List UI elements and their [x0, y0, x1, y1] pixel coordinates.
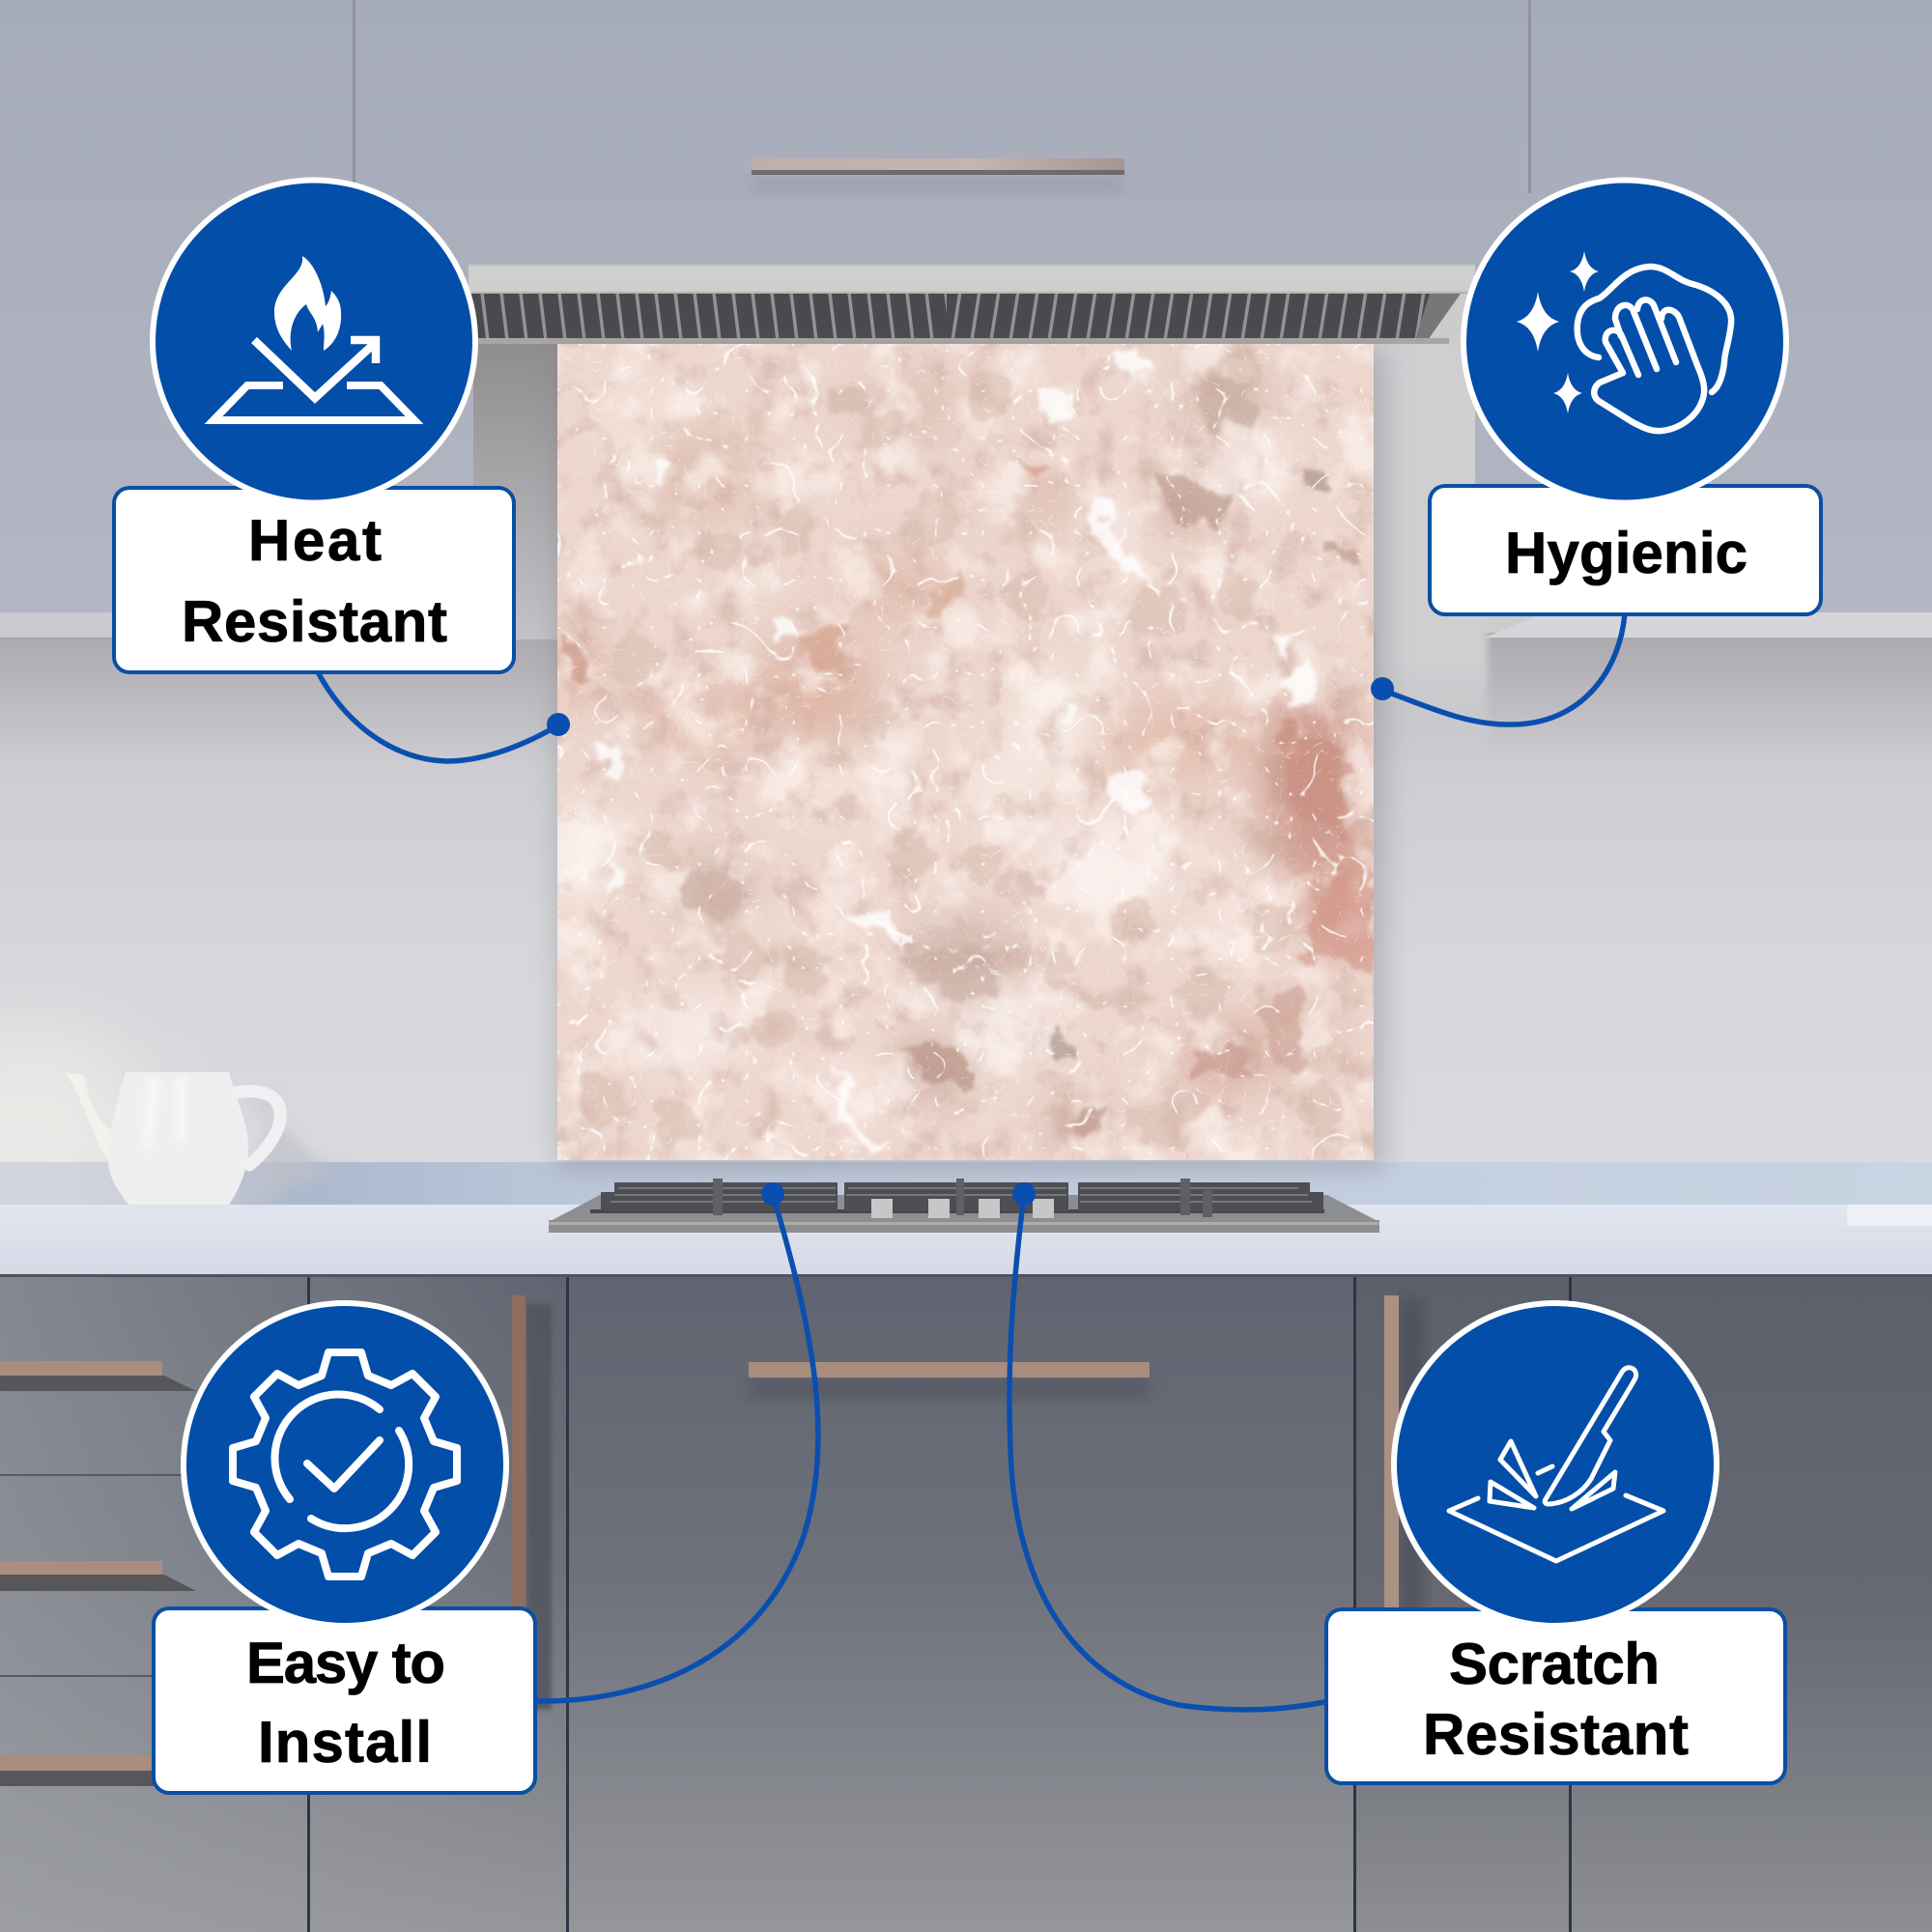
label box: heat resistant: Heat: [248, 508, 382, 573]
range hood: [469, 263, 1475, 344]
connector: hygienic: [1371, 612, 1625, 724]
shaded wall beside hood: [469, 340, 557, 639]
label box: scratch resistant: Resistant: [1423, 1702, 1689, 1767]
upper cabinet centre: [0, 0, 1932, 266]
label box: heat resistant: [114, 488, 514, 672]
wall: [0, 343, 1932, 1236]
counter back strip: [0, 1162, 1932, 1207]
feature: heat resistant: [114, 180, 514, 672]
label box: scratch resistant: [1326, 1609, 1785, 1783]
lower cabinets: [0, 1274, 1932, 1932]
feature: hygienic: [1430, 180, 1821, 614]
icon: knife scratching surface: [1449, 1368, 1663, 1561]
feature: scratch resistant: [1326, 1303, 1785, 1783]
circle badge: heat resistant: [153, 180, 475, 502]
teapot: [66, 1072, 357, 1208]
circle badge: easy to install: [184, 1303, 506, 1626]
upper cabinet right: [1475, 0, 1932, 638]
cabinet door gaps: [353, 0, 1531, 266]
circle badge: hygienic: [1463, 180, 1786, 502]
lower cabinet handles: [0, 1295, 1424, 1786]
label box: hygienic: [1430, 486, 1821, 614]
label box: easy to install: [154, 1608, 535, 1793]
circle badge: scratch resistant: [1394, 1303, 1717, 1626]
gas hob: [549, 1179, 1379, 1233]
label box: scratch resistant: Scratch: [1449, 1632, 1660, 1696]
label box: heat resistant: Resistant: [182, 589, 447, 654]
upper handle: [752, 158, 1124, 193]
label box: hygienic: Hygienic: [1505, 521, 1747, 585]
label box: easy to install: Easy to: [246, 1631, 445, 1695]
label box: easy to install: Install: [258, 1710, 432, 1775]
icon: gear with check mark: [233, 1352, 457, 1577]
worktop: [0, 1205, 1932, 1274]
icon: flame and reflecting arrow: [213, 256, 414, 420]
marble splashback panel: [542, 344, 1385, 1170]
icon: hand wiping with sparkles: [1517, 251, 1731, 431]
upper cabinet left: [0, 0, 473, 639]
connector: heat resistant: [316, 668, 570, 761]
feature: easy to install: [154, 1303, 535, 1793]
connector: easy to install: [537, 1182, 818, 1701]
connector: scratch resistant: [1009, 1182, 1324, 1710]
